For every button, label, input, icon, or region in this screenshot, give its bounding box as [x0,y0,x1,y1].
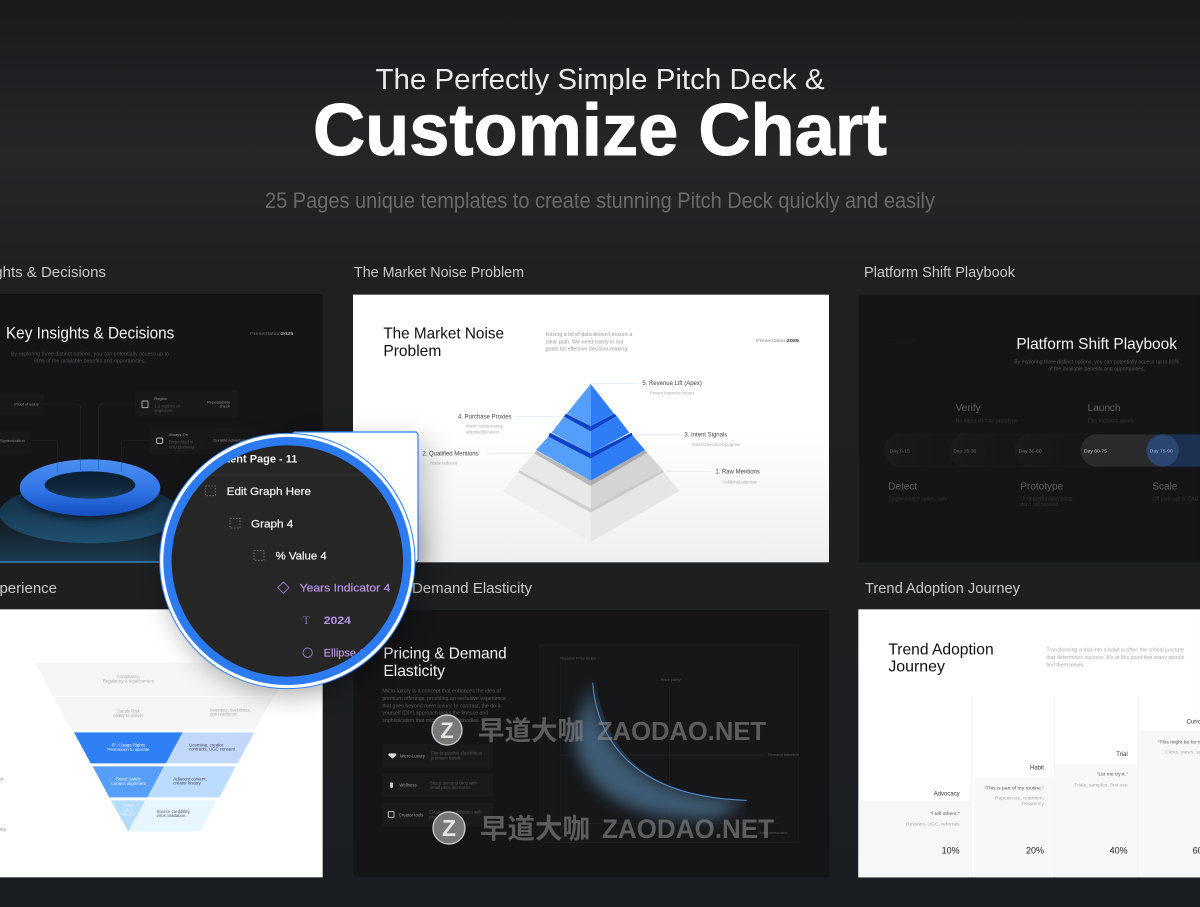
blue donut [20,459,160,516]
subtitle: 25 Pages unique templates to create stunning Pitch Deck quickly and easily [265,188,935,213]
presentation tag: Presentation 2025 [250,331,294,336]
layer: graph 4: Graph 4 [251,518,293,530]
layer: 2024 text: T [303,613,311,627]
column: habit: "This is part of my routine." [984,785,1044,791]
layer: 2024 text [302,616,351,624]
timeline pills: Day 75-90 [1150,449,1173,455]
slide description: By exploring three distinct options, you can potentially access up to [11,351,169,357]
layer: value 4: % Value 4 [276,551,327,563]
funnel labels: right [157,708,251,818]
elasticity chart: Relative Price Index [560,655,596,660]
layer: 2024 text: 2024 [324,615,352,627]
bottom step labels: Single-source spikes only [888,496,947,502]
layer: years indicator: Years Indicator 4 [300,583,390,595]
watermark two: Z [442,815,456,841]
column: habit: Repeat use, retention, [995,796,1044,802]
funnel labels: centre [103,674,154,817]
slide title [888,641,994,676]
bottom edge line [0,561,323,563]
label: raw mentions: 1. Raw Mentions [715,470,760,476]
label: purchase proxies: 4. Purchase Proxies [458,414,512,420]
column: trial: Trials, samples, first use [1074,782,1128,788]
top step labels: Launch [1088,403,1120,414]
column: curiosity [1139,720,1200,877]
label: intent signals: Interest becomes purpose [692,442,741,447]
card: creator tools [382,803,493,827]
elasticity chart: Price parity [661,677,681,682]
column: trial: 40% [1110,845,1128,855]
slide title: Journey [888,659,945,676]
funnel labels: centre: Supply Risk [117,708,141,713]
card: region: segments [154,408,172,413]
column: habit: 20% [1026,845,1044,855]
card: region: check [220,404,230,409]
funnel labels: right: contracts, UGC consent [189,746,236,751]
funnel labels: right: Source credibility, [157,809,191,814]
column: habit: frequency [1022,801,1045,807]
column: habit: Habit [1030,766,1044,772]
card: creator tools: Elastic with substitutes with [429,810,482,815]
layer: value 4 [254,551,327,563]
layer: years indicator [278,582,390,595]
timeline pills: Day 0-15 [890,449,910,455]
funnel labels: centre: Volume [121,812,136,817]
label: qualified mentions [422,451,479,466]
panel: Trend Adoption Journey [858,609,1200,877]
watermark one: 早道大咖 [478,716,584,746]
watermark two [433,812,774,844]
funnel labels: centre: Compliance [117,674,140,679]
card: creator tools: Creator tools [399,812,423,817]
funnel labels: centre: Ability to deliver [113,713,144,718]
panel: Platform Shift Playbook [859,295,1200,562]
bottom step labels: Scale [1152,481,1178,492]
slide body text [382,688,506,724]
column: trial: "Let me try it." [1097,772,1128,778]
slide body text: yourself (DIY) approach lacks the finesse and [382,711,488,717]
column: habit [974,766,1054,877]
bottom step labels: Lift plateaus or CAC [1152,496,1199,502]
column: advocacy: Advocacy [934,791,960,797]
headline line one: The Perfectly Simple Pitch Deck & [376,64,824,96]
column: trial [1055,752,1138,877]
funnel labels: right: virus validation [157,813,186,818]
card: always-on: Always-On [169,432,188,437]
label: raw mentions: Unfiltered attention [722,479,758,484]
card: wellness: Wellness [399,783,417,788]
card: wellness: Steep demand drop with [430,780,478,785]
funnel labels: centre: Reach [122,803,135,808]
card: micro-luxury: premium bands [431,755,461,760]
column separators [972,697,1139,877]
slide title [383,326,504,360]
leader lines [487,384,712,472]
slide description: By exploring three distinct options, you can potentially access up to 80% [1014,359,1179,365]
slide description [1046,647,1185,668]
card: always-on: Durable advantage [213,438,248,443]
caption: market noise: The Market Noise Problem [354,264,524,281]
card: micro-luxury [382,744,493,768]
column: advocacy: "I tell others." [930,811,960,817]
bottom step labels [888,481,1199,508]
panel: Key Insights & Decisions [0,294,323,563]
panel: Pricing & Demand Elasticity [353,610,829,877]
bottom step labels: Detect [888,481,917,492]
funnel labels: centre: Permission to operate [107,747,150,752]
slide body text: premium offerings, providing an exclusive experience [382,696,506,702]
caption: pricing: Pricing & Demand Elasticity [348,580,532,597]
slide body text: that goes beyond mere luxury. In contrast, the do-it- [382,703,502,709]
card: wellness: small price increases [430,785,470,790]
slide body text: Micro-luxury is a concept that enhances the idea of [382,688,501,694]
elasticity chart [540,645,799,843]
slide body text: sophistication that micro-luxury embodies. [382,718,480,724]
layer: ellipse: Ellipse 6 [324,647,365,659]
label: revenue lift [642,381,702,396]
slide description: clear path. We need clarity in our [546,339,624,345]
watermark two: 早道大咖 [480,813,590,844]
panel: funnel slide [0,609,323,877]
top step labels [956,403,1135,424]
column: trial: Trial [1116,752,1128,758]
slide description: Transforming a trial into a habit is often the critical juncture [1046,647,1184,653]
card: optimization [0,430,31,454]
card: region [135,390,238,418]
headline: Customize Chart: Customize Chart [313,90,887,171]
funnel labels: right: Inventory, lead times, [210,708,251,713]
top step labels: Verify [956,403,981,414]
timeline pills: Day 30-60 [1019,449,1042,455]
card: wellness [382,773,493,797]
elasticity chart: Units demanded [758,830,787,835]
donut shadow [22,470,158,520]
funnel labels: centre: Regulatory & legal barriers [103,679,154,684]
funnel labels: right: ops readiness [210,712,237,717]
card: optimization: Systemization [0,438,25,443]
card: always-on [149,427,256,454]
pyramid chart [503,384,679,542]
column: advocacy: Reviews, UGC, referrals [906,822,960,828]
funnel labels: centre: Lift & [123,808,133,813]
label: raw mentions [715,470,760,484]
card: micro-luxury: Flat-to-positive elasticity at [431,751,483,756]
watermark one: Z [440,718,454,743]
panel: The Market Noise Problem [353,295,829,562]
label: qualified mentions: 2. Qualified Mentions [422,451,479,457]
clipped side labels [0,776,6,831]
card: region: Region [154,396,167,401]
slide title: Problem [383,343,441,360]
column: advocacy: 10% [942,845,960,855]
funnel labels: centre: Context alignment [111,781,147,786]
slide description: Having a lot of data doesn't ensure a [546,332,632,338]
bottom step labels: don't roll forward [1020,502,1058,508]
top step labels: Ops friction = upside [1088,418,1135,424]
bottom step labels: Prototype [1020,481,1064,492]
layer: ellipse [303,647,365,659]
slide description: 80% of the available benefits and opportunities. [34,358,146,364]
timeline pills [884,434,1200,467]
timeline pills: Day 15-30 [953,449,977,455]
slide captions [0,264,1020,597]
slide title: Trend Adoption [888,641,994,658]
floor glow [0,518,162,562]
inverted funnel chart [35,663,292,832]
label: qualified mentions: Noise reduced [430,461,458,466]
watermark two: ZAODAO.NET [602,814,774,844]
label: intent signals: 3. Intent Signals [684,432,727,438]
layer: edit graph here: Edit Graph Here [227,486,311,498]
card: micro-luxury: Micro-Luxury [400,753,426,758]
card: creator tools: pricing [429,814,443,819]
funnel labels: centre: IP / Usage Rights [112,742,145,747]
card: always-on: Embedded in [169,439,194,444]
faint tag: Presentation [888,338,917,344]
column: advocacy [858,791,971,877]
slide title: Pricing & Demand [383,646,507,663]
label: revenue lift: 5. Revenue Lift (Apex) [642,381,702,387]
funnel labels: right: creator history [173,781,202,786]
slide title: Elasticity [383,663,445,680]
layer: content page: Content Page - 11 [205,454,297,466]
white backing card [292,432,418,562]
top step labels: No intent lift = no prototype [956,418,1018,424]
slide description: goals for effective decision-making. [546,347,629,353]
header block [265,64,935,213]
funnel labels: right: Adjacent content, [173,777,207,782]
watermark one: ZAODAO.NET [597,716,766,746]
funnel labels: centre: Brand Safety [116,776,142,781]
bottom step labels: Underperforming pilots [1020,496,1073,502]
slide title: Key Insights & Decisions [6,324,174,343]
timeline pills: Day 60-75 [1084,449,1107,455]
slide description [1014,359,1179,373]
label: revenue lift: Proven business impact [650,391,695,396]
slide description: of the available benefits and opportunities. [1048,367,1145,373]
label: purchase proxies: Intent meets money- [466,424,504,429]
caption: trend adoption: Trend Adoption Journey [865,580,1020,597]
magnifier callout: layers panel [160,433,415,689]
card: always-on: 6RU planning [169,444,195,449]
slide description: that determines success. It's at this point that many people [1046,655,1185,661]
card: proof of value: Proof of value [14,402,40,407]
label: purchase proxies [458,414,512,435]
connector lines [30,404,149,462]
slide title: The Market Noise [383,326,504,343]
funnel labels: right: Licensing, creator [189,742,224,747]
label: intent signals [684,432,741,447]
layer: graph 4 [230,518,293,530]
slide description: find themselves. [1046,662,1085,668]
callout shadow [168,440,428,692]
presentation tag: Presentation 2025 [756,338,799,343]
caption: platform shift: Platform Shift Playbook [864,264,1015,281]
card: region: Repeatability [207,399,230,404]
blue disc base [0,483,181,543]
watermark one [432,715,766,746]
card: proof of value [0,393,44,415]
slide title [383,646,507,680]
slide description [11,351,169,364]
slide description [546,332,632,353]
elasticity chart: Demand baseline [768,752,799,757]
card: region: 1-2 regions or [154,403,181,408]
slide title: Platform Shift Playbook [1016,336,1177,353]
label: purchase proxies: adjusted behavior [466,430,499,435]
